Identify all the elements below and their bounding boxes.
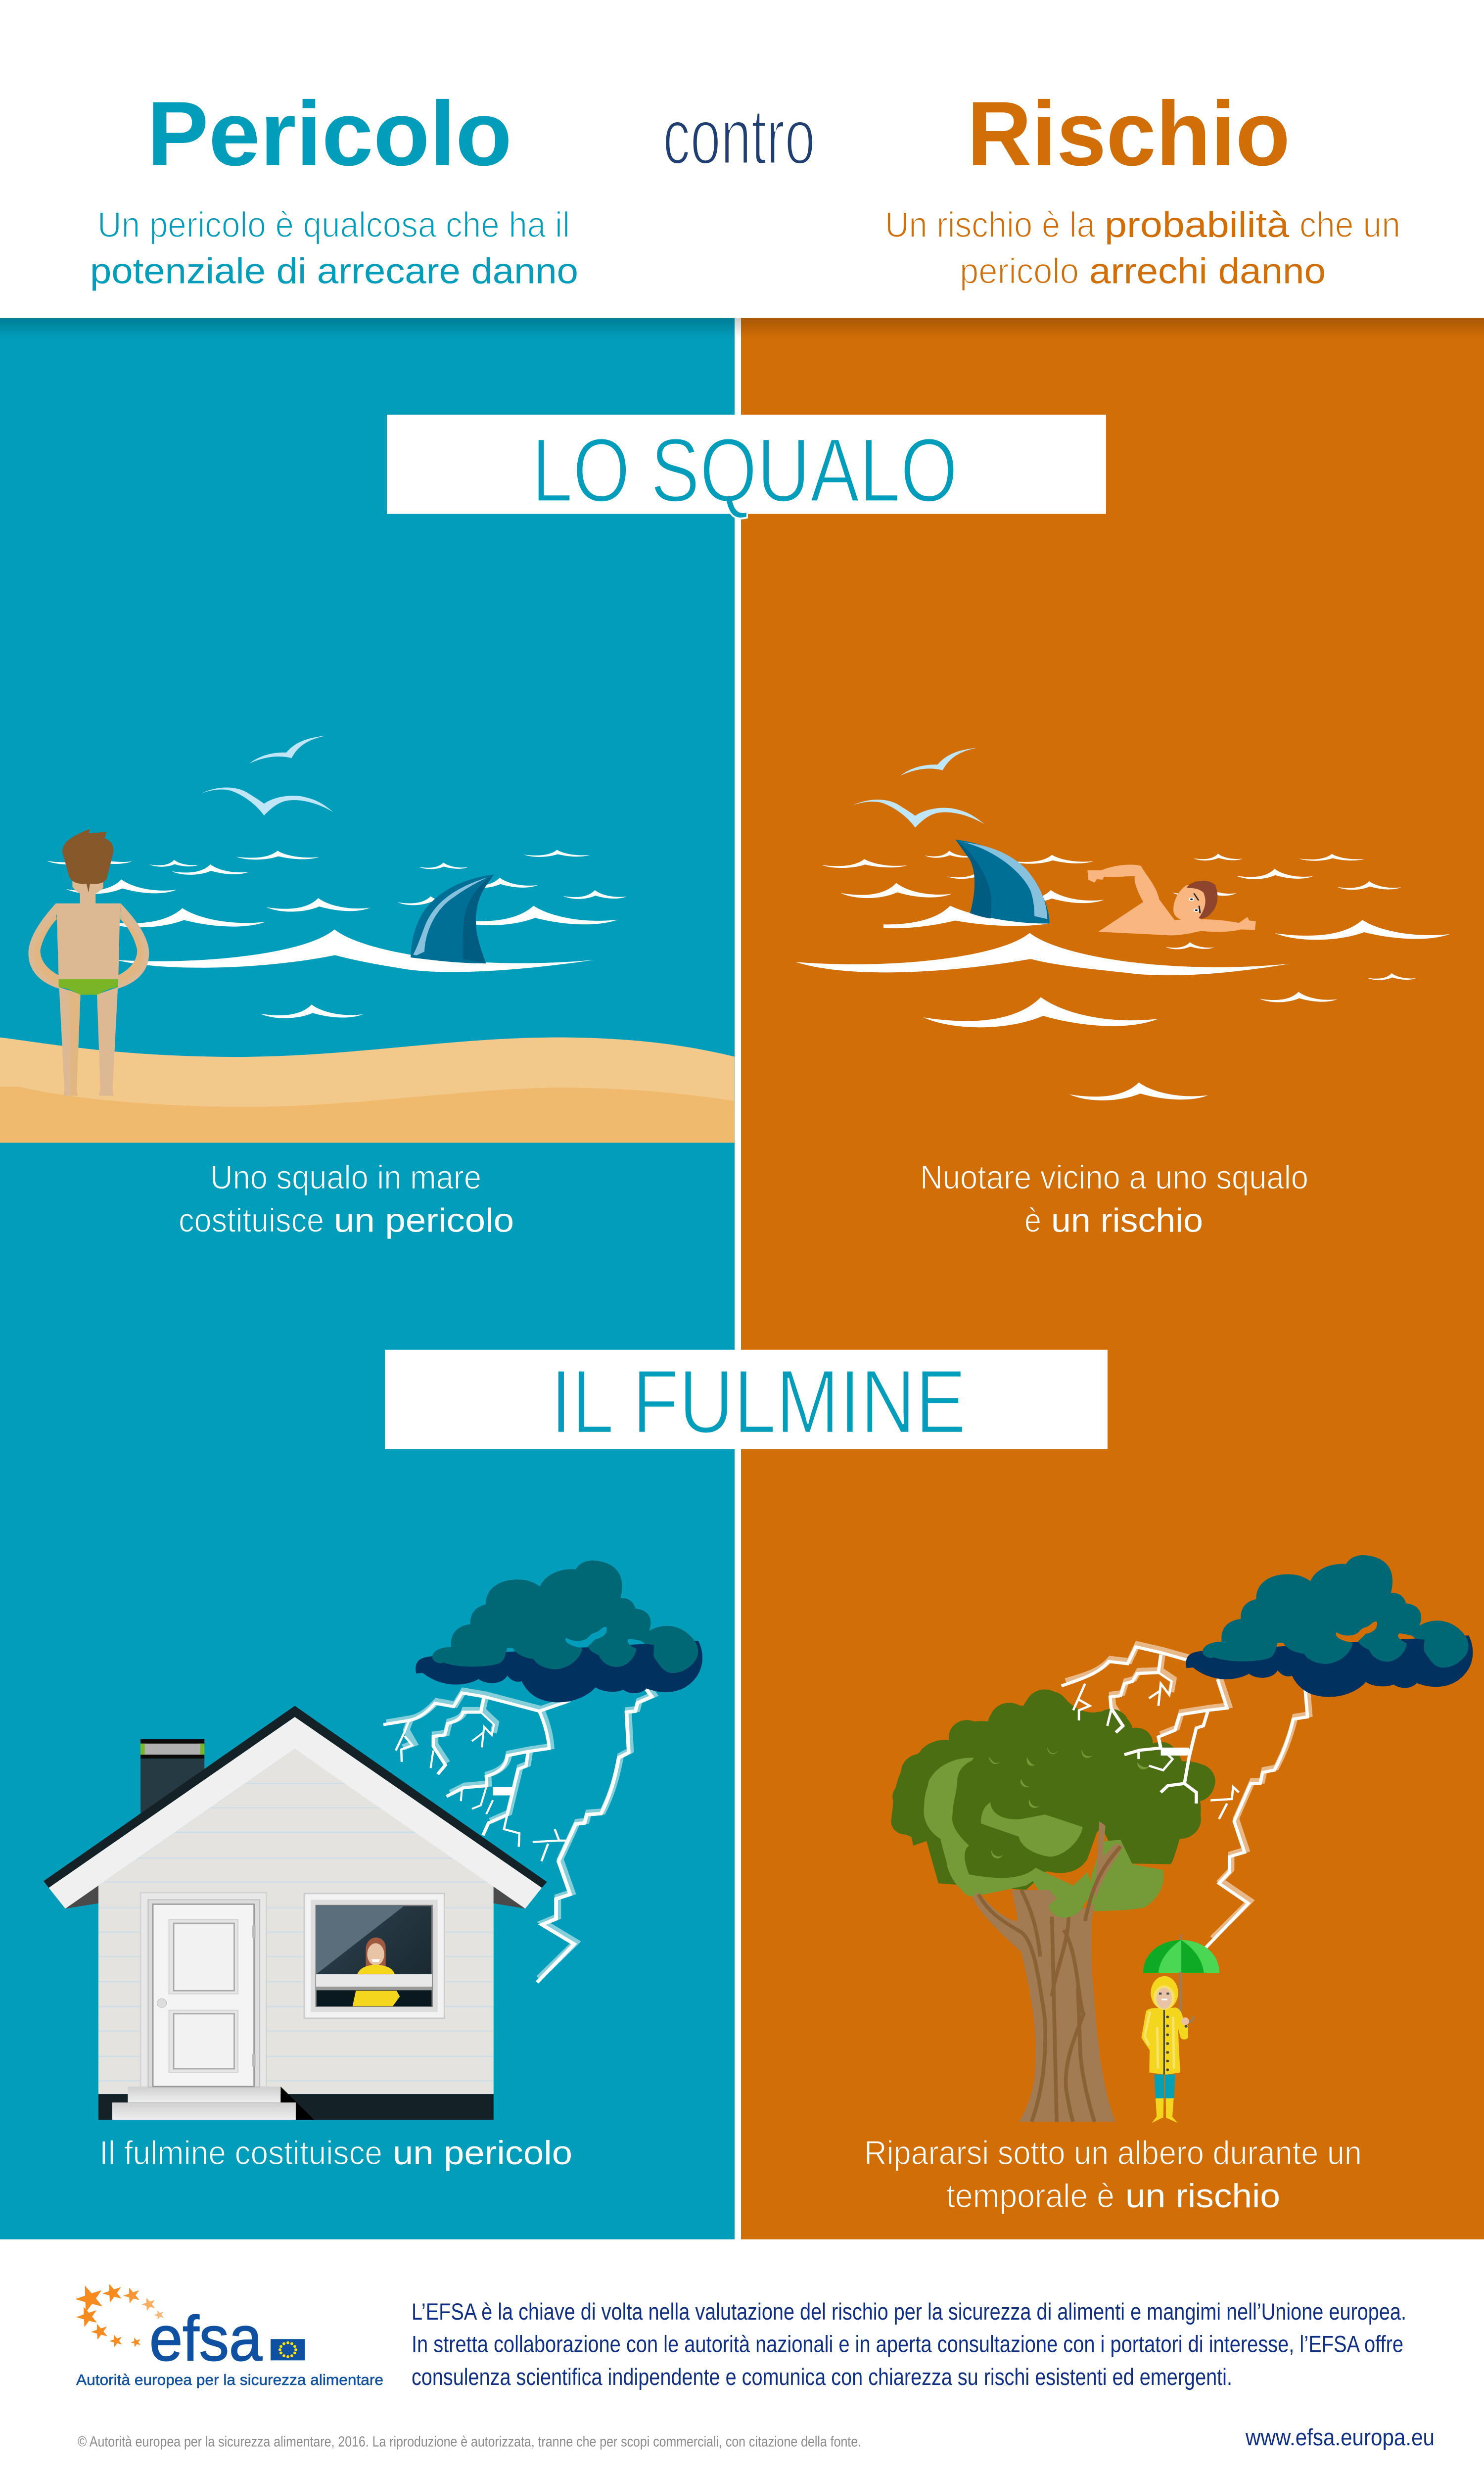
- door: [140, 1893, 267, 2087]
- illustration: storm cloud and lightning over house: [383, 1561, 702, 1982]
- logo stars: [72, 2281, 166, 2348]
- shark fin: [955, 840, 1050, 924]
- foliage details: [981, 1747, 1150, 1858]
- lightning bolts: [1062, 1647, 1307, 1948]
- text block: about EFSA: [412, 2299, 1406, 2390]
- text block: risk definition: che un: [1299, 204, 1400, 244]
- panel: risk background: [741, 318, 1484, 2239]
- storm cloud over tree: [1186, 1555, 1473, 1697]
- text block: risk definition: arrechi danno: [1089, 251, 1326, 291]
- face and hand: [1157, 1988, 1189, 2025]
- text block: risk definition: Un rischio è la: [885, 204, 1095, 244]
- text block: about EFSA: consulenza scientifica indipendente e comunica con chiarezza su rischi esistenti ed emergenti.: [412, 2364, 1232, 2390]
- lightning glow: [386, 1687, 653, 1978]
- foundation and steps: [98, 2087, 494, 2120]
- caption: shark hazard: costituisce: [179, 1202, 324, 1239]
- man standing: [28, 829, 149, 1095]
- text block: risk definition: probabilità: [1105, 204, 1290, 244]
- text block: risk definition: pericolo: [960, 251, 1079, 291]
- caption: shark risk: un rischio: [1051, 1202, 1203, 1239]
- EU flag: [271, 2339, 305, 2360]
- tree canopy light foliage: [924, 1758, 1163, 1918]
- caption: shark hazard: Uno squalo in mare: [210, 1159, 481, 1196]
- illustration: swimmer near shark: [795, 748, 1450, 1100]
- caption: lightning hazard: Il fulmine costituisce: [99, 2134, 382, 2171]
- illustration: woman with umbrella: [1141, 1935, 1219, 2123]
- heading: contro: contro: [663, 93, 815, 181]
- wall with siding: [98, 1749, 494, 2094]
- raincoat: [1141, 1976, 1188, 2075]
- tree canopy front: [952, 1728, 1154, 1878]
- caption: lightning risk: un rischio: [1125, 2177, 1280, 2215]
- lightning glow: [1066, 1644, 1309, 1938]
- illustration: house: [44, 1706, 547, 2120]
- umbrella: [1143, 1935, 1219, 2023]
- logo wordmark: efsa: [149, 2303, 262, 2374]
- illustration: man on beach watching shark: [0, 736, 735, 1142]
- caption: shark hazard: un pericolo: [334, 1202, 514, 1239]
- text block: hazard definition: Un pericolo è qualcosa che ha il: [97, 204, 570, 244]
- lightning bolts: [383, 1689, 652, 1982]
- text block: hazard definition: [90, 204, 578, 291]
- caption: shark risk: Nuotare vicino a uno squalo: [920, 1159, 1308, 1196]
- copyright: © Autorità europea per la sicurezza alimentare, 2016. La riproduzione è autorizzata, tranne che per scopi commerciali, con citazione della fonte.: [78, 2433, 861, 2450]
- waves: [795, 851, 1450, 1100]
- logo: EFSA: [72, 2281, 383, 2388]
- panel: hazard background: [0, 318, 735, 2239]
- caption: lightning hazard: [99, 2134, 572, 2171]
- caption: shark risk: [920, 1159, 1308, 1239]
- heading: Pericolo: Pericolo: [147, 83, 512, 185]
- waves: [47, 850, 627, 1018]
- caption: lightning hazard: un pericolo: [393, 2134, 572, 2171]
- caption: lightning risk: temporale è: [946, 2177, 1114, 2215]
- swimmer: [1087, 864, 1256, 935]
- text block: hazard definition: potenziale di arrecare danno: [90, 251, 578, 291]
- top shadow of panels: [0, 318, 1484, 338]
- window with woman: [304, 1894, 444, 2018]
- shark fin: [411, 874, 494, 963]
- caption: lightning risk: Ripararsi sotto un albero durante un: [864, 2134, 1362, 2171]
- caption: shark risk: è: [1024, 1202, 1041, 1239]
- illustration: tree with lightning: [891, 1644, 1309, 2122]
- logo tagline: Autorità europea per la sicurezza alimentare: [76, 2371, 383, 2388]
- text block: risk definition: [885, 204, 1400, 291]
- heading: Rischio: Rischio: [967, 83, 1290, 185]
- seagulls: [202, 736, 333, 815]
- tree canopy back: [891, 1689, 1215, 1890]
- caption: shark hazard: [179, 1159, 514, 1239]
- roof: [44, 1706, 547, 1908]
- website: www.efsa.europa.eu: [1245, 2425, 1435, 2451]
- banner: LO SQUALO: LO SQUALO: [532, 420, 958, 521]
- storm cloud: [416, 1561, 702, 1702]
- trousers and boots: [1152, 2075, 1178, 2123]
- caption: lightning risk: [864, 2134, 1362, 2215]
- seagulls: [853, 748, 985, 828]
- banner: IL FULMINE: IL FULMINE: [551, 1351, 966, 1452]
- chimney: [140, 1739, 204, 1817]
- sand: [0, 1038, 735, 1142]
- tree trunk: [973, 1821, 1123, 2122]
